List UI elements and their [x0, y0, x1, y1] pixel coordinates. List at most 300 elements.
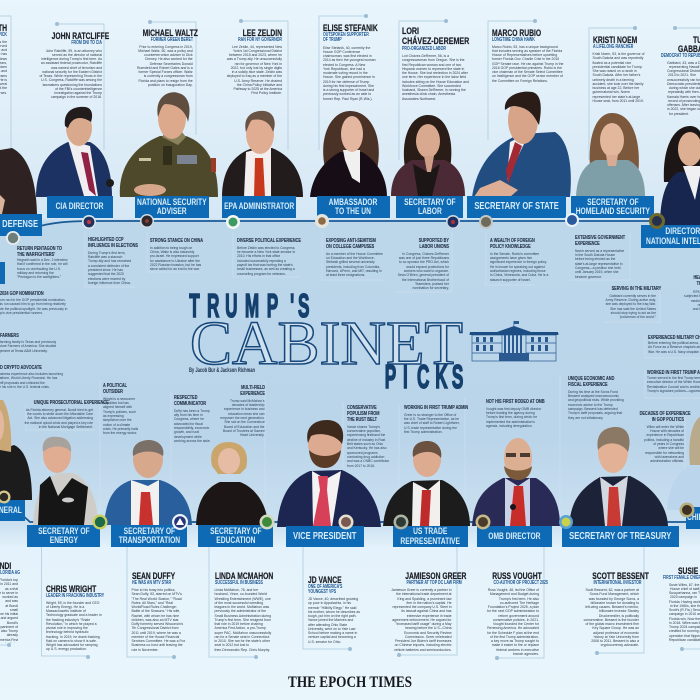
profile: Pam Bondi: small — [10, 608, 18, 612]
fact: Not his first rodeo at OMB: implemented the administration's — [486, 420, 535, 424]
profile: Kristi Noem: presidential candidate for Trump. — [592, 65, 643, 69]
profile: Linda McMahon: America First Action, a pro-Trump — [214, 626, 266, 630]
fact: Supported by labor unions: was one of just three Republicans — [399, 256, 449, 260]
profile: Scott Bessent: was founded by George Soros, a — [589, 596, 639, 600]
profile: Linda McMahon: Linda McMahon, 76, and her — [214, 588, 258, 592]
profile: Russ Vought: Vought founded the Center for — [493, 622, 539, 626]
seal: OMB — [476, 514, 490, 530]
fact: Respected communicator: growth, and rural — [174, 430, 199, 434]
fact: Multi-field experience: education mean she can — [228, 412, 264, 416]
fact: Respected communicator: Duffy has been a Trump — [174, 408, 210, 412]
fact: A political outsider: skepticism over the — [103, 418, 132, 422]
title word: TRUMP'S: TRUMP'S — [189, 287, 309, 325]
seal: Vice President — [338, 514, 354, 530]
profile: Kristi Noem: House seat, from 2011 until 2019. — [592, 99, 644, 103]
fact: Highlighted CCP influence: a consistent defender of the — [88, 264, 129, 268]
job label: Secretary of Defense — [0, 214, 42, 236]
fact: Exposing anti-Semitism: at least three resignations. — [326, 273, 365, 277]
profile: Elise Stefanik: 2014 as then the youngest woman — [323, 58, 376, 62]
profile: Linda McMahon: SUCCESSFUL IN BUSINESS — [214, 580, 262, 586]
seal: Education — [260, 514, 274, 530]
job label: Director of National Intelligence — [641, 225, 700, 248]
profile: Scott Bessent: INTERNATIONAL INVESTOR — [594, 580, 641, 586]
profile: John Ratcliffe: U.S. Congress, Ratcliffe was among the — [41, 78, 102, 82]
profile: Pam Bondi: as a trial — [5, 586, 18, 590]
profile: Sean Duffy: children, was also an MTV star. — [132, 618, 179, 622]
fact: Multi-field experience: EXPERIENCE — [240, 391, 264, 397]
job label: National Security Adviser: ADVISER — [157, 206, 187, 216]
seal: Homeland Security — [565, 213, 579, 227]
fact: A wealth of foreign policy knowledge: A WEALTH OF FOREIGN — [490, 238, 535, 244]
job label: Vice President: VICE PRESIDENT — [293, 531, 357, 542]
job label: National Security Adviser: NATIONAL SECURITY — [137, 197, 207, 207]
fact: Decades of experience in GOP politics: DECADES OF EXPERIENCE — [640, 411, 691, 417]
profile: Michael Waltz: FORMER GREEN BERET — [150, 36, 193, 42]
fact: Working in first Trump admin, Jamieson Greer: was chief of staff to Robert Lighthizer, — [404, 421, 460, 425]
fact: Decades of experience in GOP politics: where she will be — [658, 446, 684, 450]
profile: JD Vance: ONE OF AMERICA'S — [308, 584, 342, 590]
profile: Lee Zeldin: LEE ZELDIN — [243, 26, 282, 38]
profile: Sean Duffy: Duffy formerly served Wisconsin's — [132, 622, 183, 626]
profile: Lori Chavez-DeRemer: includes sitting on the House Education and — [402, 80, 469, 84]
fact: Unique prosecutorial experience: UNIQUE PROSECUTORIAL EXPERIENCE — [34, 400, 109, 406]
fact: Extensive government experience: EXPERIENCE — [575, 241, 600, 247]
profile: Scott Bessent: adjunct professor of economic — [593, 630, 639, 634]
profile: Elise Stefanik: moderate voting record in the — [323, 71, 368, 75]
fact: A political outsider: as expressing — [103, 414, 124, 418]
profile: Tulsi Gabbard: 2013 to 2021. She — [668, 73, 696, 77]
fact: Respected communicator: responsibility, economic — [174, 426, 209, 430]
portrait: Tulsi Gabbard — [660, 126, 700, 226]
profile: Russ Vought: branch agencies. — [513, 652, 539, 656]
profile: JD Vance — [308, 574, 360, 644]
fact: Unique prosecutorial experience: the national opioid crisis and played a key role — [25, 421, 93, 425]
fact: Respected communicator: development while — [174, 435, 202, 439]
profile: John Ratcliffe: served as the director of national — [52, 53, 102, 57]
fact: Working in first Trump admin, Jamieson Greer: first Trump administration. — [404, 430, 442, 434]
profile: Russ Vought: reform government around — [498, 614, 539, 618]
portrait: Pete Hegseth — [0, 148, 37, 214]
profile: Jamieson Greer: Commission. Greer celebrated — [405, 635, 452, 639]
profile: Pam Bondi: and was — [5, 599, 18, 603]
profile: John Ratcliffe: an assistant federal prosecutor, Ratcliffe — [41, 61, 102, 65]
fact: Return Pentagon to the warfighters: RETURN PENTAGON TO — [17, 246, 62, 252]
fact: Exposing anti-Semitism: ON COLLEGE CAMPUSES — [326, 244, 374, 250]
fact: A political outsider: crisis. He primarily hails — [103, 427, 138, 431]
fact: Highlighted CCP influence: elections were marred by — [88, 277, 125, 281]
profile: Elise Stefanik: York Republican, she had a — [323, 67, 365, 71]
job label: Secretary of Homeland Security — [571, 196, 654, 218]
profile: Lori Chavez-DeRemer: congresswoman from Oregon. She is the — [402, 58, 464, 62]
job label: Secretary of Labor: LABOR — [418, 206, 441, 216]
portrait: Sean Duffy — [104, 440, 192, 525]
fact: Unique economic and fiscal experience: Bessent analyzed macroeconomic — [568, 394, 619, 398]
fact: Respected communicator: ally from his time in — [174, 413, 203, 417]
portrait: Lee Zeldin — [222, 111, 303, 197]
profile: JD Vance: U.S. senator for Ohio. — [308, 640, 341, 644]
fact: Supported by labor unions: would expand protections for — [406, 265, 449, 269]
profile: Pam Bondi: in 2011 and — [0, 582, 18, 586]
profile: Elise Stefanik: 2019 for her defense of Trump — [323, 80, 369, 84]
fact: A political outsider — [103, 383, 138, 435]
profile: JD Vance: memoir "Hillbilly Elegy." He said — [308, 606, 356, 610]
profile: Pam Bondi: worked as — [2, 595, 18, 599]
job label: Interior side tab — [0, 262, 5, 284]
fact: Return Pentagon to the warfighters: Hegseth said in a Dec. 2 interview — [17, 258, 68, 262]
fact: Conservative populism from the Rust Belt: combating drug addiction — [347, 455, 384, 459]
profile: Sean Duffy: 7th Congressional District from — [132, 626, 178, 630]
profile: Pam Bondi — [0, 561, 20, 643]
profile: Linda McMahon: previously the administrator of the — [214, 609, 266, 613]
profile: Michael Waltz: Cheney. He also worked for the — [145, 57, 193, 61]
profile: Marco Rubio: the Committee on Foreign Relations. — [492, 78, 548, 82]
profile: Michael Waltz: Defense Secretaries Donald — [150, 62, 193, 66]
fact: Decades of experience in GOP politics: administration officials. — [650, 459, 684, 463]
profile: Sean Duffy: Rules: All Stars," and "Real — [132, 601, 173, 605]
profile: Scott Bessent: Druckenmiller, is politically — [599, 614, 639, 618]
fact: A wealth of foreign policy knowledge: In the Senate, Rubio's committee — [490, 252, 539, 256]
fact: Crypto advocate — [0, 365, 63, 389]
profile: Chris Wright: of Liberty Energy. He is a — [46, 605, 84, 609]
title word: CABINET: CABINET — [190, 310, 463, 378]
fact: Diverse political experience — [237, 238, 301, 276]
portrait: Jamieson Greer — [383, 441, 470, 526]
profile: Linda McMahon: seat in 2012 but lost to — [214, 643, 249, 647]
fact: Unique economic and fiscal experience: campaign, Bessent has defended — [568, 407, 618, 411]
profile: Elise Stefanik: chairwoman, was first elected in — [323, 54, 372, 58]
seal: National Security Council — [140, 214, 154, 228]
fact: Conservative populism from the Rust Belt: Belt states such as Ohio — [347, 442, 383, 446]
profile: Elise Stefanik: during his first impeachment. She — [323, 84, 374, 88]
fact: Multi-field experience: experience in business and — [224, 407, 264, 411]
portrait: Michael Waltz — [120, 92, 218, 197]
profile: John Ratcliffe — [39, 30, 110, 99]
job label: Ambassador to the UN — [317, 196, 390, 218]
fact: Working in first Trump admin, Jamieson Greer: the U.S. Trade Representative, as he — [404, 417, 459, 421]
fact: Serving in the military: SERVING IN THE MILITARY — [612, 286, 661, 292]
profile: Scott Bessent: SCOTT BESSENT — [592, 570, 649, 581]
fact: Unique economic and fiscal experience: Trump's tariff proposals, arguing that — [568, 411, 622, 415]
profile: Kristi Noem: floated as a potential vice — [592, 60, 631, 64]
job label: US Trade Representative: US TRADE — [413, 526, 448, 536]
profile: Kristi Noem: gubernatorial win, Noem — [592, 90, 630, 94]
profile: Russ Vought: a key move as Trump sought to — [491, 639, 539, 643]
profile: Kristi Noem: KRISTI NOEM — [592, 34, 637, 45]
seal: CIA — [82, 215, 96, 229]
fact: Strong stance on China: STRONG STANCE ON CHINA — [150, 238, 203, 244]
profile: Sean Duffy — [132, 570, 186, 652]
profile: Elise Stefanik: ELISE STEFANIK — [323, 22, 378, 32]
profile: John Ratcliffe: JOHN RATCLIFFE — [52, 30, 109, 40]
job label: Secretary of Homeland Security: SECRETARY OF — [587, 197, 638, 207]
fact: Worked in first Trump admin, Scott Turner — [647, 370, 700, 393]
profile: Scott Bessent — [574, 571, 639, 648]
fact: Not his first rodeo at OMB: Trump's first term, during which he — [486, 415, 537, 419]
fact: Serving in the military: "policeman of the world." — [619, 315, 656, 319]
profile: Lori Chavez-DeRemer: anesthesia clinic chain, Anesthesia — [402, 92, 455, 96]
fact: Highlighted CCP influence: During Trump's first term, — [88, 250, 125, 254]
fact: Multi-field experience: Trump said McMahon's — [230, 398, 264, 402]
seal: Transportation — [172, 514, 188, 530]
profile: Jamieson Greer: vehicle batteries and semiconductors. — [394, 648, 452, 652]
profile: Chris Wright: CHRIS WRIGHT — [46, 582, 96, 594]
fact: Exposing anti-Semitism: EXPOSING ANTI-SEMITISM — [326, 238, 376, 244]
fact: Not his first rodeo at OMB — [486, 399, 545, 428]
seal: State UN — [315, 214, 329, 228]
profile: Pete Hegseth — [0, 22, 7, 94]
fact: Working in first Trump admin, Jamieson Greer — [404, 405, 468, 434]
fact: Supported by labor unions: the International Brotherhood of — [402, 278, 449, 282]
fact: Exposing anti-Semitism: As a member of the House Committee — [326, 252, 383, 256]
fact: Conservative populism from the Rust Belt: sponsored programs — [347, 451, 378, 455]
fact: Working in first Trump admin, Jamieson Greer: Greer is no stranger to the Office of — [404, 412, 456, 416]
job label: Secretary of Homeland Security: HOMELAND SECURITY — [575, 206, 650, 216]
fact: Conservative populism from the Rust Belt — [347, 405, 390, 468]
job label: EPA Administrator — [222, 196, 296, 218]
fact: Respected communicator: working across the aisle. — [174, 439, 211, 443]
fact: Supported by labor unions: to co-sponsor the PRO Act, which — [399, 260, 449, 264]
profile: Susie Wiles: 2020 campaign in — [670, 595, 697, 599]
profile: Sean Duffy: Sean Duffy, 53, starred on MTV's — [132, 592, 182, 596]
fact: Decades of experience in GOP politics: House with decades of — [650, 429, 684, 433]
fact: Extensive government experience: before being elected as the — [575, 257, 615, 261]
profile: Jamieson Greer: "increased tariff usage" during a May — [395, 622, 452, 626]
job label: Secretary of Education: EDUCATION — [216, 535, 255, 545]
profile: Michael Waltz — [137, 26, 198, 87]
fact: Working in first Trump admin, Jamieson Greer: WORKING IN FIRST TRUMP ADMIN — [404, 405, 468, 411]
fact: Respected communicator — [174, 395, 211, 443]
job label: Secretary of Labor — [396, 196, 463, 218]
portrait: Elise Stefanik — [310, 111, 387, 197]
fact: Strong stance on China: In addition to being tough on — [150, 246, 192, 250]
profile: JD Vance: School before making a name in — [308, 631, 357, 635]
profile: Russ Vought — [487, 570, 548, 656]
profile: Scott Bessent: Key Square Group. He was an — [592, 626, 639, 630]
fact: Highlighted CCP influence: foreign influence from China. — [88, 281, 131, 285]
fact: A wealth of foreign policy knowledge: POLICY KNOWLEDGE — [490, 244, 531, 250]
profile: Chris Wright: up U.S. energy production. — [46, 647, 87, 651]
seal: Labor — [446, 215, 460, 229]
fact: Extensive government experience: Congress—a position she held — [575, 266, 621, 270]
profile: Jamieson Greer — [391, 570, 466, 652]
profile: Russ Vought: RUSS VOUGHT — [492, 570, 542, 581]
profile: Kristi Noem: She was raised on a ranch in — [592, 69, 637, 73]
fact: Unique prosecutorial experience: Act. She also advanced litigation addressing — [27, 416, 93, 420]
profile: Lori Chavez-DeRemer: Associates Northwest. — [402, 96, 436, 100]
fact: Strong stance on China: China, Waltz is also staunchly — [150, 250, 194, 254]
fact: Serving in the military: She has said the United States — [610, 307, 656, 311]
job label: Secretary of Transportation: TRANSPORTATION — [118, 535, 180, 545]
job label: Ambassador to the UN: TO THE UN — [336, 206, 371, 216]
fact: Multi-field experience: Board of Education and the — [224, 425, 264, 429]
fact: Highlighted CCP influence: Ratcliffe was a staunch — [88, 255, 122, 259]
profile: Michael Waltz: position on Inauguration Day. — [148, 83, 193, 87]
profile: Elise Stefanik: OUTSPOKEN SUPPORTER — [323, 32, 369, 38]
fact: Extensive government experience: until January 2019, when she — [575, 270, 618, 274]
profile: JD Vance: after attending Ohio State — [308, 622, 347, 626]
profile: Linda McMahon: super PAC. McMahon unsuccessfully — [214, 630, 271, 634]
fact: Supported by labor unions: In Congress, Chávez-DeRemer — [402, 252, 449, 256]
fact: Multi-field experience: Board of Trustees at Sacred — [223, 429, 264, 433]
fact: Unique economic and fiscal experience: they are not inflationary. — [568, 416, 603, 420]
fact: Not his first rodeo at OMB: Vought was first deputy OMB director — [486, 406, 541, 410]
profile: Russ Vought: co-authored The Heritage — [500, 601, 539, 605]
profile: Jamieson Greer: JAMIESON GREER — [405, 570, 466, 581]
profile: John Ratcliffe: national security for the Eastern District — [42, 70, 102, 74]
fact: Supported by labor unions: Teamsters, praised her — [415, 282, 449, 286]
fact: 2024 GOP nomination: 2024 GOP NOMINATION — [0, 291, 44, 297]
fact: Respected communicator: advocated for fiscal — [174, 422, 203, 426]
profile: Marco Rubio: LONGTIME CHINA HAWK — [492, 36, 535, 42]
job label: OMB Director: OMB DIRECTOR — [488, 531, 541, 541]
profile: Lee Zeldin: 2022, but only lost by single digits — [231, 66, 282, 70]
profile: Jamieson Greer: its lawsuit against China and has — [401, 609, 452, 613]
portrait: Marco Rubio — [472, 92, 571, 197]
profile: Lee Zeldin: U.S. Army Reserve. He chaired — [234, 78, 282, 82]
profile: Lee Zeldin: York's 1st Congressional District — [233, 49, 282, 53]
fact: Diverse political experience: DIVERSE POLITICAL EXPERIENCE — [237, 238, 301, 244]
profile: Scott Bessent: left-wing causes. Bessent's mentor, — [585, 605, 639, 609]
fact: Supported by labor unions: LABOR UNIONS — [419, 244, 449, 250]
fact: Decades of experience in GOP politics: IN GOP POLITICS — [652, 417, 684, 423]
fact: Highlighted CCP influence: suggested that the 2020 — [88, 272, 124, 276]
footer logo: The Epoch Times: THE EPOCH TIMES — [288, 674, 412, 691]
profile: Pam Bondi: already — [7, 633, 18, 637]
profile: John Ratcliffe: campaign in the summer of 2016. — [51, 95, 102, 99]
profile: Russ Vought: Trump's first term. He also — [499, 596, 539, 600]
fact: Supported by labor unions — [398, 238, 450, 290]
profile: Lori Chavez-DeRemer: PRO-ORGANIZED LABOR — [402, 46, 446, 52]
profile: Jamieson Greer: Economic and Security Review — [404, 630, 452, 634]
portrait: Lori Chavez-DeRemer — [391, 115, 465, 196]
fact: Serving in the military: should stop trying to act as the — [611, 311, 656, 315]
fact: Supported by labor unions: workers who want to organize. — [404, 269, 449, 273]
fact: Extensive government experience — [575, 235, 626, 279]
profile: Tulsi Gabbard — [661, 34, 700, 116]
profile: Russ Vought: conservative policies. In 2021, — [493, 618, 539, 622]
fact: Unique economic and fiscal experience: and geopolitical risks. While providing — [568, 398, 624, 402]
fact: Conservative populism from the Rust Belt: from 2017 to 2018. — [347, 464, 375, 468]
profile: Elise Stefanik: elected to Congress. A New — [323, 62, 365, 66]
fact: A political outsider: to politics but has — [103, 401, 129, 405]
profile: Sean Duffy: SEAN DUFFY — [132, 570, 175, 581]
profile: Scott Bessent: history at Yale University from — [594, 635, 639, 639]
profile: Linda McMahon: Small Business Administration during — [214, 614, 271, 618]
profile: Michael Waltz: is currently a congressman from — [144, 74, 193, 78]
profile: Linda McMahon: ran for a Senate seat in Connecticut — [214, 635, 269, 639]
seal: Justice — [0, 490, 10, 504]
fact: Exposing anti-Semitism: Harvard, UPenn, and MIT, resulting in — [326, 269, 382, 273]
profile: Elise Stefanik: former Rep. Paul Ryan (R-Wis.). — [323, 96, 372, 100]
portrait: Russ Vought — [472, 438, 560, 526]
seal: National Intelligence — [649, 213, 665, 229]
fact: Not his first rodeo at OMB: before leading the agency during — [486, 411, 535, 415]
fact: Return Pentagon to the warfighters: that if confirmed in the role, he will — [17, 262, 68, 266]
fact: Multi-field experience: empower the next generation. — [220, 416, 264, 420]
profile: Linda McMahon: then-Democratic Rep. Chris Murphy. — [214, 648, 270, 652]
fact: Conservative populism from the Rust Belt: and was a CNBC contributor — [347, 459, 389, 463]
profile: Lori Chavez-DeRemer: one term. Her experience in the labor field — [402, 75, 466, 79]
profile: Marco Rubio: vice chairman of the Senate Select Committee — [492, 70, 563, 74]
profile: JD Vance: Vance joined the Marines and — [308, 618, 353, 622]
portrait: Chris Wright — [33, 437, 98, 525]
fact: Highlighted CCP influence — [88, 237, 138, 285]
profile: Lori Chavez-DeRemer: husband, Shawn DeRemer, in running the — [402, 88, 466, 92]
profile: Sean Duffy: World/Road Rules Challenge: — [132, 605, 177, 609]
profile: Chris Wright: Technology graduate and a leader in — [46, 613, 102, 617]
fact: Decades of experience in GOP politics: Wiles will enter the White — [647, 424, 684, 428]
fact: Conservative populism from the Rust Belt: conservative populism, — [347, 429, 381, 433]
profile: Sean Duffy: role in November. — [132, 648, 158, 652]
fact: A political outsider: Wright is a newcomer — [103, 396, 135, 400]
fact: Strong stance on China: 2022 Russian invasion, but he has — [150, 263, 201, 267]
profile: Michael Waltz: Rumsfeld and Robert Gates and is a — [137, 66, 193, 70]
fact: Not his first rodeo at OMB: NOT HIS FIRST RODEO AT OMB — [486, 399, 545, 405]
profile: Kristi Noem: A LIFELONG RANCHER — [592, 44, 633, 50]
fact: Diverse political experience: counseling program for veterans. — [237, 272, 286, 276]
profile: Chris Wright: Wright, 59, is the founder and CEO — [46, 600, 99, 604]
profile: Linda McMahon: that role in 2019 before chairing — [214, 622, 263, 626]
fact: Strong stance on China: since called for an end to the war. — [150, 267, 200, 271]
profile: Jamieson Greer: represented the company U.S. Steel in — [392, 605, 452, 609]
fact: Experienced military chaplain — [648, 335, 700, 354]
job label: Ambassador to the UN: AMBASSADOR — [329, 197, 378, 207]
profile: Sean Duffy: "The Real World: Boston," "Road — [132, 596, 182, 600]
profile: Scott Bessent: of the global macro investment firm — [586, 622, 639, 626]
fact: Return Pentagon to the warfighters: THE WARFIGHTERS' — [17, 252, 55, 258]
fact: Conservative populism from the Rust Belt: THE RUST BELT — [347, 417, 377, 423]
fact: Return Pentagon to the warfighters: military and returning the — [17, 271, 54, 275]
profile: JD Vance: University, went on to Yale Law — [308, 627, 355, 631]
profile: Lori Chavez-DeRemer: CHÁVEZ-DEREMER — [402, 35, 469, 46]
job label: Secretary of Treasury: SECRETARY OF TREASURY — [569, 531, 672, 542]
job label: Secretary of Education: SECRETARY OF — [210, 526, 261, 536]
profile: Chris Wright: LEADER IN FRACKING INDUSTRY — [46, 592, 104, 598]
fact: Serving in the military: Army Reserve. During active duty, — [606, 298, 656, 302]
fact: Extensive government experience: became governor. — [575, 275, 602, 279]
fact: Crypto advocate: D CRYPTO ADVOCATE — [0, 365, 42, 371]
profile: Jamieson Greer: firm in the nation's capital. He — [407, 601, 452, 605]
profile: Michael Waltz: MICHAEL WALTZ — [142, 26, 197, 38]
profile: Jamieson Greer: King and Spalding, a prominent law — [397, 596, 452, 600]
profile: Russ Vought: federal workers in executive — [496, 648, 539, 652]
fact: A political outsider: notion of a climate — [103, 423, 130, 427]
profile: Russ Vought: Renewing America. He advocated — [487, 626, 539, 630]
profile: Lee Zeldin: First Policy Institute. — [251, 91, 282, 95]
profile: Lori Chavez-DeRemer: Hispanic women to represent the state in — [402, 67, 464, 71]
profile: John Ratcliffe: lawmakers questioning the foundations — [43, 82, 102, 86]
fact: Strong stance on China: pro-Israel. He expressed support — [150, 254, 199, 258]
title word: PICKS: PICKS — [385, 358, 463, 396]
profile: Sean Duffy: Rachel, with whom he has nine — [132, 614, 179, 618]
profile: Marco Rubio — [492, 26, 564, 83]
profile: Russ Vought: Management and Budget during — [490, 592, 539, 596]
profile: John Ratcliffe: investigation against the Trump — [54, 91, 102, 95]
fact: Extensive government experience: state's at-large representative in — [575, 262, 622, 266]
profile: John Ratcliffe: intelligence during Trump's first term. As — [41, 57, 102, 61]
seal: State — [479, 215, 493, 229]
fact: Conservative populism from the Rust Belt: and Kentucky. He has also — [347, 446, 387, 450]
portrait: JD Vance — [277, 420, 381, 527]
fact: Conservative populism from the Rust Belt: decline of industry in Rust — [347, 438, 385, 442]
profile: Sean Duffy: HE WAS AN MTV STAR — [132, 580, 171, 586]
fact: A wealth of foreign policy knowledge: assignments have given him — [490, 256, 532, 260]
portrait: Susie Wiles — [667, 415, 700, 510]
profile: John Ratcliffe: was named chief of terrorism and — [51, 66, 102, 70]
seal: Defense — [6, 231, 20, 245]
job label: CIA Director: CIA DIRECTOR — [56, 201, 104, 211]
fact: A wealth of foreign policy knowledge: staunch supporter of Israel. — [490, 278, 531, 282]
